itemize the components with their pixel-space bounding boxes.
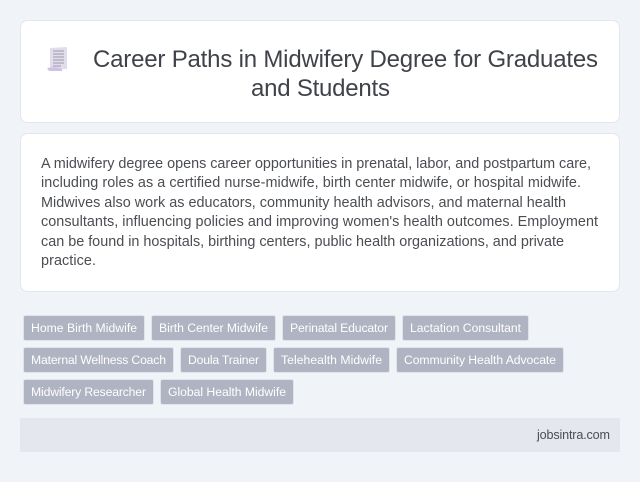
- title: and Students: [251, 75, 390, 102]
- panel: title card: [20, 20, 620, 122]
- footer source text: jobsintra.com: [536, 428, 610, 442]
- icon: document scroll: [47, 47, 67, 71]
- tag: Birth Center Midwife: [152, 316, 276, 340]
- tag: Lactation Consultant: Lactation Consultant: [410, 321, 522, 335]
- footer bar: [20, 418, 620, 452]
- tag: Midwifery Researcher: [24, 380, 154, 404]
- tag: Lactation Consultant: [402, 316, 528, 340]
- title: [93, 46, 598, 102]
- panel: description: [20, 134, 620, 292]
- tag: Maternal Wellness Coach: [24, 348, 174, 372]
- tag: Home Birth Midwife: Home Birth Midwife: [31, 321, 137, 335]
- tag list: [24, 316, 564, 404]
- tag: Doula Trainer: Doula Trainer: [188, 353, 259, 367]
- description text: including roles as a certified nurse-midwife, birth center midwife, or hospital midwife.: [41, 175, 581, 191]
- tag: Doula Trainer: [180, 348, 266, 372]
- tag: Midwifery Researcher: Midwifery Researcher: [31, 385, 146, 399]
- tag: Perinatal Educator: [282, 316, 396, 340]
- tag: Home Birth Midwife: [24, 316, 144, 340]
- description text: can be found in hospitals, birthing centers, public health organizations, and private: [41, 234, 564, 250]
- tag: Global Health Midwife: [160, 380, 294, 404]
- tag: Birth Center Midwife: Birth Center Midwife: [159, 321, 268, 335]
- tag: Community Health Advocate: Community Health Advocate: [404, 353, 556, 367]
- description text: [41, 156, 598, 269]
- tag: Telehealth Midwife: [274, 348, 390, 372]
- tag: Global Health Midwife: Global Health Midwife: [168, 385, 286, 399]
- tag: Maternal Wellness Coach: Maternal Wellness Coach: [31, 353, 166, 367]
- tag: Perinatal Educator: Perinatal Educator: [290, 321, 388, 335]
- tag: Community Health Advocate: [396, 348, 564, 372]
- description text: Midwives also work as educators, community health advisors, and maternal health: [41, 195, 566, 211]
- description text: consultants, influencing policies and improving women's health outcomes. Employment: [41, 214, 598, 230]
- description text: practice.: [41, 253, 96, 269]
- title: Career Paths in Midwifery Degree for Graduates: [93, 46, 598, 73]
- tag: Telehealth Midwife: Telehealth Midwife: [281, 353, 382, 367]
- description text: A midwifery degree opens career opportunities in prenatal, labor, and postpartum care,: [41, 156, 591, 172]
